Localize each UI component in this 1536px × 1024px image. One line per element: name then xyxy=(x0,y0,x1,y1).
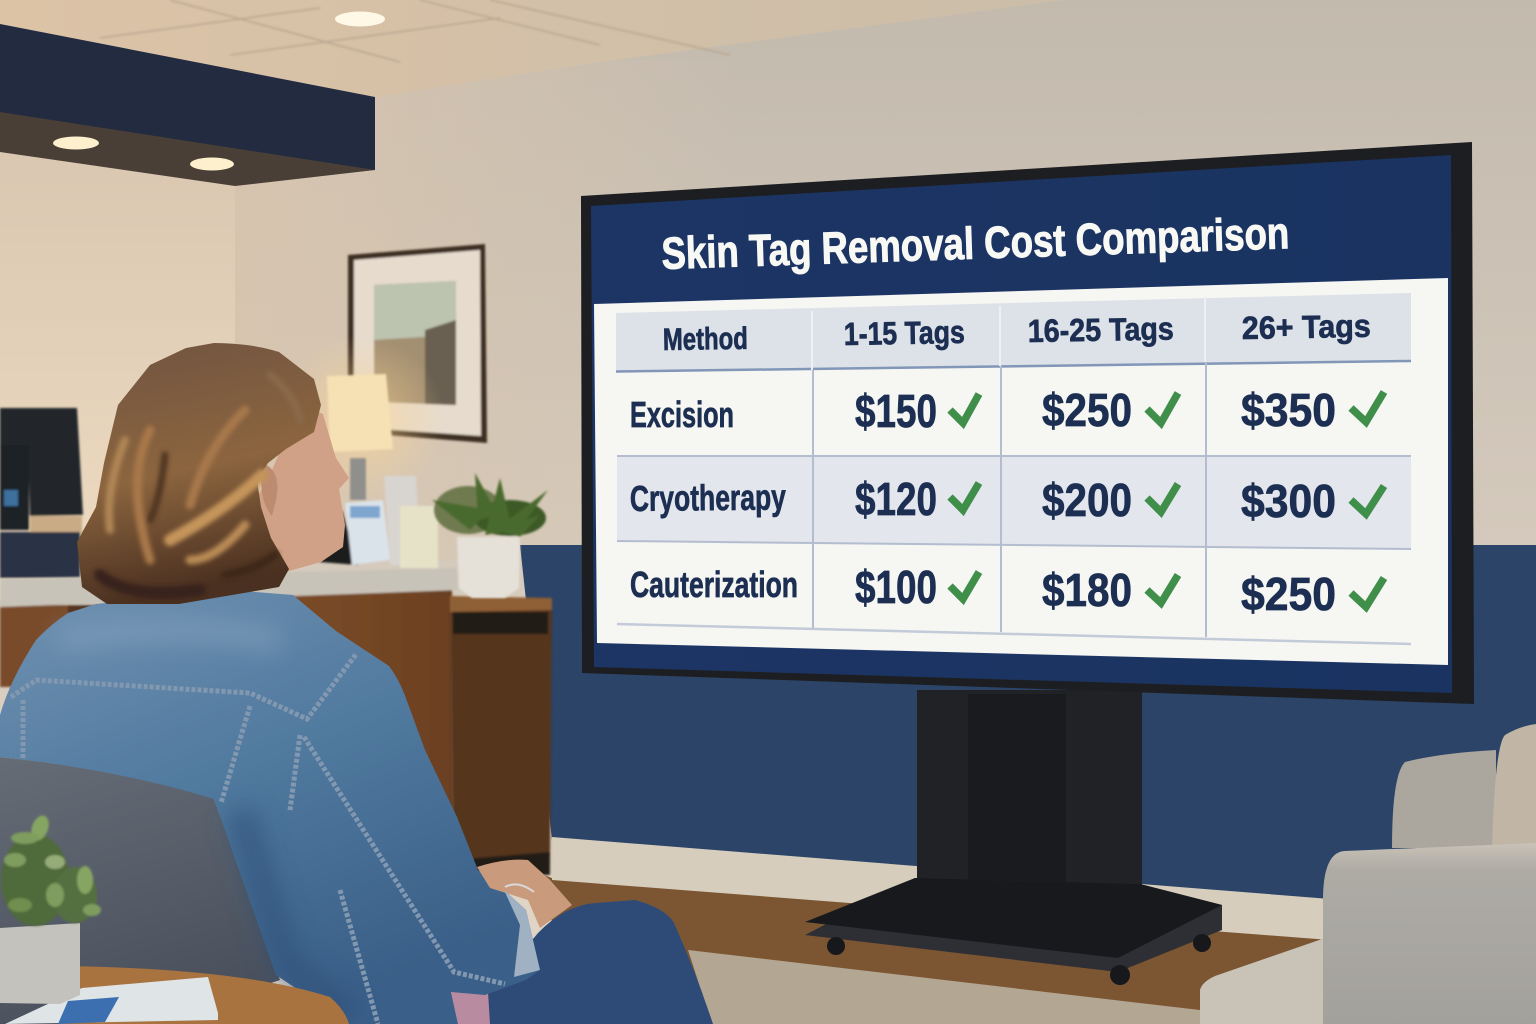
Cryotherapy prices: $200 xyxy=(1042,474,1132,526)
jacket shading xyxy=(60,630,350,1020)
foreground plant xyxy=(0,813,101,1004)
rug xyxy=(688,950,1215,1024)
woman seen from behind xyxy=(0,343,713,1024)
hair xyxy=(77,343,321,604)
Cauterization prices: $250 xyxy=(1241,568,1336,620)
potted plant on cabinet xyxy=(432,473,548,598)
neck and face xyxy=(245,405,349,590)
title: Skin Tag Removal Cost Comparison xyxy=(661,207,1290,279)
right armchairs xyxy=(1200,724,1536,1024)
navy screen background xyxy=(591,155,1452,693)
cryotherapy row band xyxy=(617,456,1411,549)
jacket cuff xyxy=(504,890,540,977)
ceiling xyxy=(0,0,1065,97)
ear xyxy=(261,463,277,516)
bracelet xyxy=(505,884,534,892)
display screen xyxy=(581,142,1474,704)
side cabinet xyxy=(450,596,552,875)
soffit xyxy=(0,24,375,186)
floor xyxy=(500,860,1330,1024)
Cryotherapy prices xyxy=(855,473,1336,527)
Cryotherapy prices: $120 xyxy=(855,473,937,525)
jacket seams xyxy=(11,653,505,1024)
table rules xyxy=(616,295,1411,644)
Excision prices: $150 xyxy=(855,385,937,437)
display stand xyxy=(805,690,1222,985)
row label: Excision: Excision xyxy=(630,394,734,435)
pink shirt hem xyxy=(451,992,490,1024)
brochures xyxy=(320,476,438,568)
header: 16-25 Tags: 16-25 Tags xyxy=(1027,310,1174,349)
table lamp xyxy=(275,335,445,505)
hand xyxy=(477,860,572,928)
green check marks xyxy=(950,392,1384,607)
Excision prices xyxy=(855,384,1336,437)
round side table xyxy=(60,966,349,1024)
Cryotherapy prices: $300 xyxy=(1241,475,1336,527)
table header band xyxy=(616,293,1411,371)
monitor bezel xyxy=(581,142,1474,704)
hair highlights xyxy=(100,375,300,593)
recessed lights xyxy=(53,12,385,170)
header: 26+ Tags: 26+ Tags xyxy=(1241,308,1371,346)
row label: Cryotherapy: Cryotherapy xyxy=(630,476,786,519)
Cauterization prices xyxy=(855,561,1336,620)
reception counter xyxy=(0,568,458,870)
left grey armchair xyxy=(0,757,280,1024)
header: 1-15 Tags: 1-15 Tags xyxy=(843,314,965,352)
magazine xyxy=(5,977,218,1024)
left back wall xyxy=(0,150,235,600)
Excision prices: $250 xyxy=(1042,384,1132,436)
reception desk monitor xyxy=(0,408,83,578)
header: Method: Method xyxy=(663,321,748,357)
denim jacket xyxy=(0,590,540,1024)
navy wainscot xyxy=(520,545,1536,920)
jeans xyxy=(485,900,713,1024)
Cauterization prices: $180 xyxy=(1042,564,1132,616)
row label: Cauterization: Cauterization xyxy=(630,564,798,605)
Excision prices: $350 xyxy=(1241,384,1336,436)
framed picture xyxy=(348,244,487,443)
Cauterization prices: $100 xyxy=(855,561,937,613)
white table panel xyxy=(594,278,1448,665)
baseboard xyxy=(552,837,1330,940)
